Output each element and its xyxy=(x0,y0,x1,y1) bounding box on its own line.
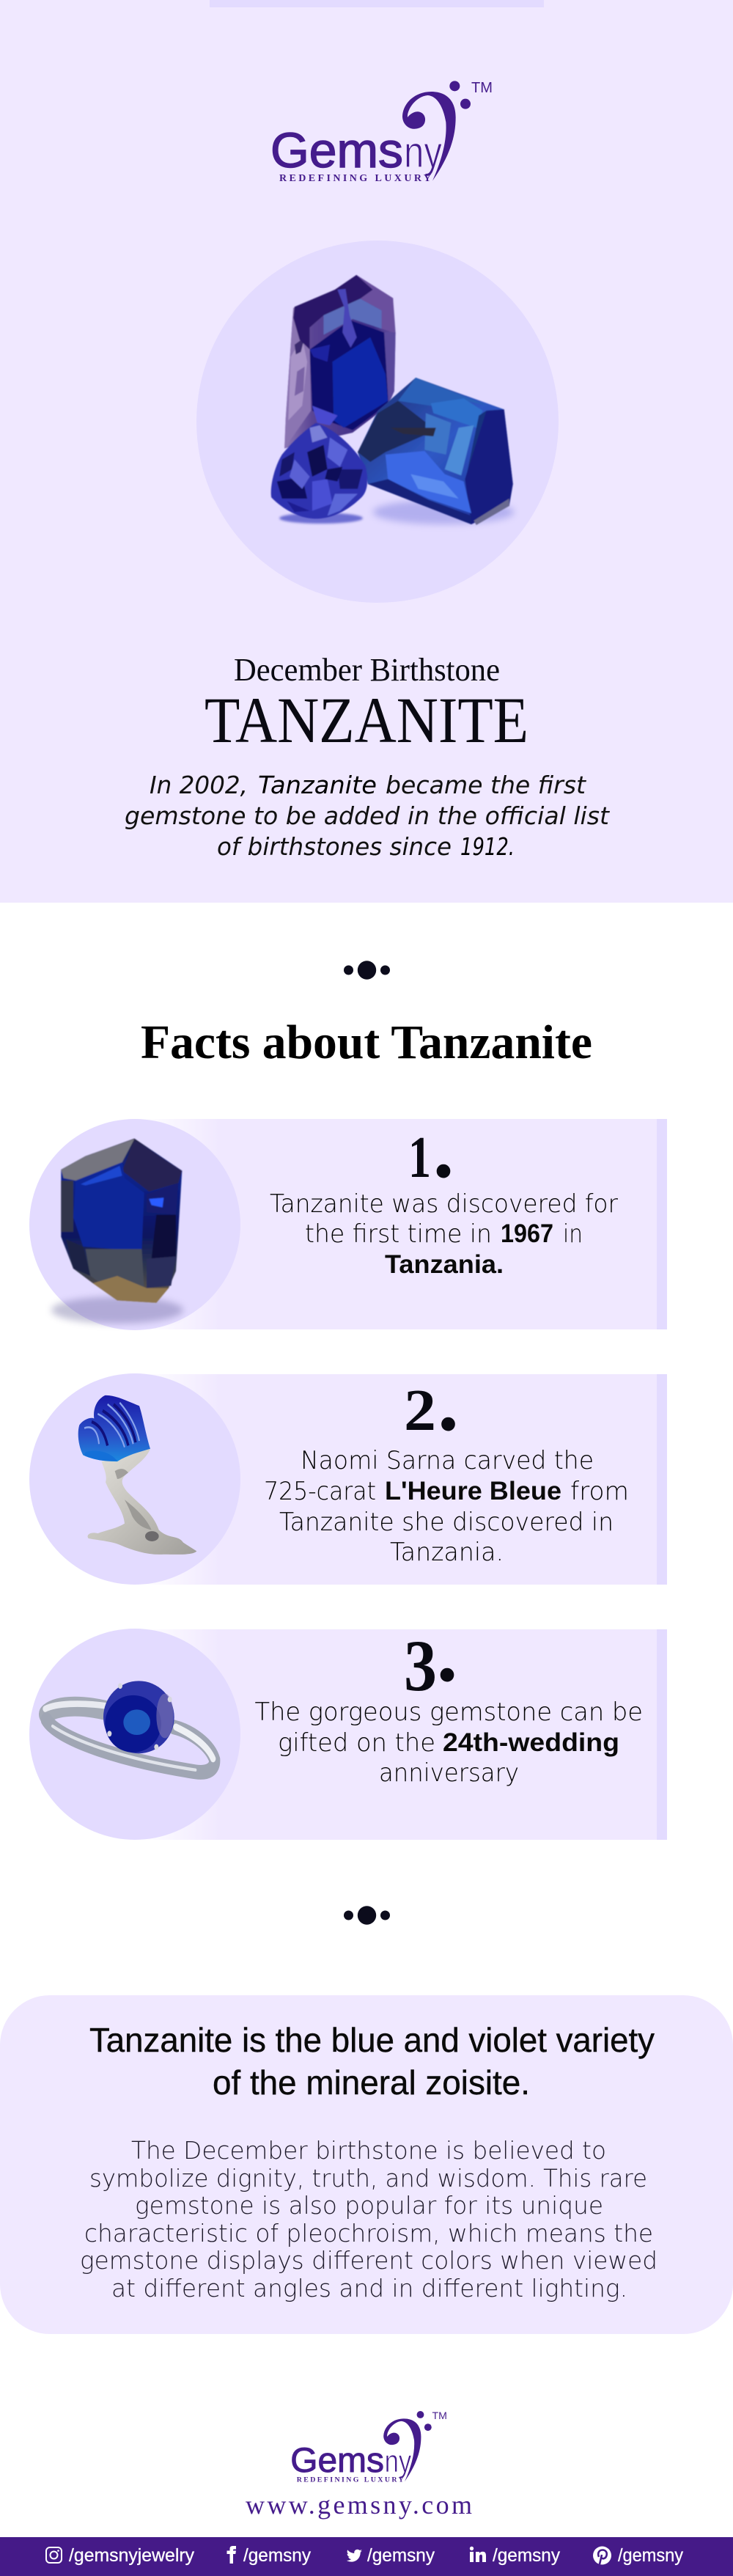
image: rough crystal xyxy=(51,1139,183,1324)
card body text xyxy=(80,2136,658,2302)
card body text: The December birthstone is believed to xyxy=(131,2136,606,2165)
footer logo wordmark: Gems xyxy=(290,2441,384,2480)
panel: zoisite description card xyxy=(0,1995,733,2334)
sculpture shading xyxy=(115,1469,152,1530)
fact 2 number: . xyxy=(438,1355,459,1448)
fact 2 number: 2 xyxy=(404,1377,436,1443)
fact 2 circle xyxy=(29,1373,240,1585)
social: twitter: /gemsny xyxy=(367,2545,435,2566)
footer social bar xyxy=(0,2537,733,2576)
fact 3 text: 24th-wedding xyxy=(443,1728,619,1757)
gem shadow xyxy=(279,500,514,524)
fact 2 text: Naomi Sarna carved the xyxy=(301,1446,594,1475)
footer logo wordmark: ny xyxy=(385,2444,412,2478)
heading: Facts about Tanzanite: Facts about Tanzanite xyxy=(141,1016,592,1069)
intro text xyxy=(125,771,610,861)
fact 2 text xyxy=(264,1446,629,1567)
website url: www.gemsny.com xyxy=(246,2490,472,2520)
fact 1 text: Tanzanite was discovered for xyxy=(270,1189,618,1219)
bar background xyxy=(0,2537,733,2576)
trillion cut gem xyxy=(271,423,367,518)
image: tanzanite gem group xyxy=(271,275,514,525)
logo wordmark: REDEFINING LUXURY xyxy=(279,173,431,184)
top tab xyxy=(210,0,544,7)
card body text: gemstone displays different colors when viewed xyxy=(80,2246,658,2275)
fact 2 number xyxy=(404,1355,459,1448)
intro text: Tanzanite xyxy=(258,771,377,799)
fact 1 text: Tanzania. xyxy=(385,1250,504,1279)
hero circle xyxy=(196,241,559,603)
fact 1 text xyxy=(270,1189,618,1279)
footer logo wordmark xyxy=(290,2410,447,2484)
logo wordmark: TM xyxy=(471,80,493,96)
panel: fact 3 xyxy=(29,1606,667,1840)
card background xyxy=(0,1995,733,2334)
panel: hero background xyxy=(0,0,733,903)
logo: Gemsny footer xyxy=(290,2410,447,2484)
fact 1 number: . xyxy=(433,1102,454,1195)
footer logo wordmark: REDEFINING LUXURY xyxy=(297,2476,404,2484)
card heading: Tanzanite is the blue and violet variety xyxy=(89,2021,655,2059)
logo wordmark: ny xyxy=(404,128,442,177)
tall crystal xyxy=(284,275,396,449)
fact 2 text: L'Heure Bleue xyxy=(385,1477,561,1505)
social: pinterest: /gemsny xyxy=(618,2545,683,2566)
card heading: of the mineral zoisite. xyxy=(213,2063,530,2102)
social: pinterest xyxy=(593,2545,683,2566)
fact 2 text: Tanzania. xyxy=(390,1538,504,1567)
title: TANZANITE: TANZANITE xyxy=(205,685,528,757)
fact 2 accent stripe xyxy=(657,1374,667,1585)
fact 3 number: . xyxy=(437,1606,457,1699)
intro text: became the first xyxy=(386,771,586,799)
panel: fact 1 xyxy=(29,1102,667,1330)
fact 3 text: gifted on the xyxy=(278,1728,435,1758)
divider dots xyxy=(344,1906,390,1925)
social: linkedin: /gemsny xyxy=(493,2545,560,2566)
sculpture base and stem xyxy=(88,1449,196,1555)
logo wordmark: Gems xyxy=(270,123,403,178)
social: facebook: /gemsny xyxy=(243,2545,311,2566)
social: instagram: /gemsnyjewelry xyxy=(69,2545,194,2566)
logo icon: clef and dots xyxy=(402,81,471,181)
heading: December Birthstone: December Birthstone xyxy=(234,652,500,688)
card heading xyxy=(89,2021,655,2102)
fact 1 number: 1 xyxy=(408,1124,431,1190)
fact 1 accent stripe xyxy=(657,1119,667,1329)
image: carved L'Heure Bleue sculpture xyxy=(78,1395,196,1555)
logo: Gemsny header xyxy=(270,80,493,184)
fact 1 text: the first time in xyxy=(305,1219,492,1249)
footer logo icon xyxy=(383,2411,432,2481)
carved tanzanite wave xyxy=(78,1395,150,1461)
intro text: In 2002, xyxy=(150,771,248,799)
footer logo wordmark: TM xyxy=(432,2410,447,2421)
fact 3 text: The gorgeous gemstone can be xyxy=(255,1698,643,1727)
crystal body xyxy=(61,1139,182,1303)
panel: fact 2 xyxy=(29,1355,667,1585)
divider dots xyxy=(344,961,390,980)
sculpture hole xyxy=(145,1531,159,1541)
fact 3 number: 3 xyxy=(404,1625,437,1706)
fact 3 text xyxy=(255,1698,643,1788)
image: tanzanite ring xyxy=(45,1681,215,1772)
fact 1 text: 1967 xyxy=(501,1219,553,1248)
fact 1 text: in xyxy=(563,1219,583,1249)
fact 3 band xyxy=(139,1629,657,1840)
intro text: gemstone to be added in the official list xyxy=(125,801,610,830)
fact 3 accent stripe xyxy=(657,1629,667,1840)
fact 1 circle xyxy=(29,1119,240,1330)
fact 3 number xyxy=(404,1606,457,1706)
intro text: 1912. xyxy=(460,832,515,861)
intro text: of birthstones since xyxy=(217,832,452,861)
crystal shadow xyxy=(51,1296,183,1324)
fact 2 text: from xyxy=(570,1477,629,1506)
logo wordmark xyxy=(270,80,493,184)
fact 3 circle xyxy=(29,1629,240,1840)
ring gemstone xyxy=(103,1681,174,1753)
card body text: gemstone is also popular for its unique xyxy=(135,2191,603,2220)
fact 3 text: anniversary xyxy=(379,1758,519,1788)
fact 1 band xyxy=(139,1119,657,1329)
fact 1 number xyxy=(408,1102,454,1195)
card body text: symbolize dignity, truth, and wisdom. This rare xyxy=(89,2164,647,2192)
ring band xyxy=(45,1704,215,1772)
fact 2 band xyxy=(139,1374,657,1585)
card body text: characteristic of pleochroism, which means the xyxy=(84,2219,653,2247)
card body text: at different angles and in different lighting. xyxy=(111,2274,627,2302)
fact 2 text: 725-carat xyxy=(264,1477,376,1506)
fact 2 text: Tanzanite she discovered in xyxy=(279,1508,614,1537)
rough blue stone xyxy=(358,378,513,525)
